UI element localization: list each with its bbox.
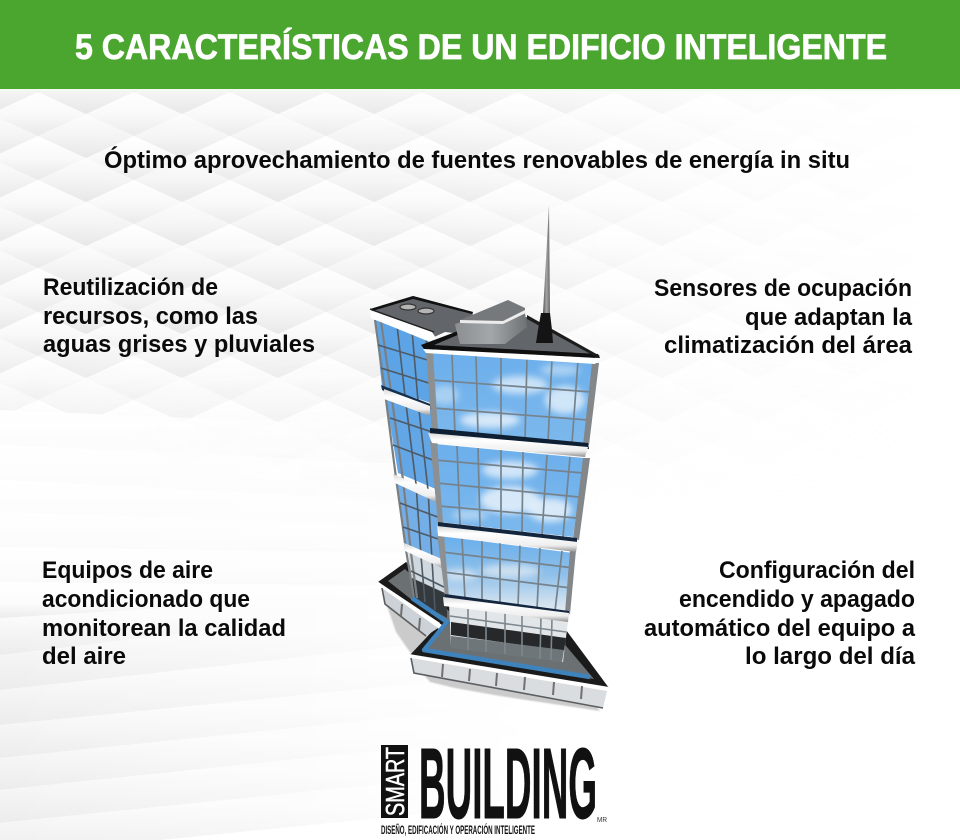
- front roof with penthouse and spire: [421, 205, 600, 364]
- podium blue pipe: [412, 598, 590, 677]
- text: right top feature: Sensores de ocupación: [654, 275, 912, 302]
- logo MR mark: MR: [597, 817, 607, 824]
- front tower: section 4: [449, 604, 568, 662]
- text: left bottom feature: [42, 557, 286, 670]
- front tower: section 3: [437, 533, 576, 614]
- text: right top feature: climatización del área: [664, 332, 913, 359]
- ground shadow: [386, 603, 600, 711]
- rear tower: [370, 296, 473, 618]
- front tower: section 2: [430, 441, 590, 540]
- spire: [543, 205, 550, 313]
- rear roof: [370, 296, 473, 338]
- text: right top feature: [654, 275, 913, 359]
- illustration: smart building: [370, 205, 609, 711]
- text: right bottom feature: [644, 557, 916, 670]
- text: left top feature: aguas grises y pluviales: [43, 331, 315, 358]
- logo: Smart Building: [380, 728, 607, 840]
- text: right bottom feature: Configuración del: [719, 557, 915, 584]
- text: left bottom feature: del aire: [42, 643, 126, 670]
- text: right bottom feature: lo largo del día: [745, 643, 916, 670]
- penthouse: [455, 313, 527, 344]
- background pattern: [0, 91, 666, 840]
- text: left bottom feature: monitorean la calidad: [42, 615, 286, 642]
- text: left top feature: [43, 274, 315, 358]
- logo box SMART: SMART: [380, 747, 410, 816]
- text: right bottom feature: automático del equipo a: [644, 615, 916, 642]
- roof vents: [400, 304, 416, 310]
- text: top feature: Óptimo aprovechamiento de fuentes renovables de energía in situ: [104, 146, 850, 174]
- podium roof: [377, 562, 609, 708]
- text: left top feature: recursos, como las: [43, 303, 258, 330]
- text: left top feature: Reutilización de: [43, 274, 218, 301]
- front tower: ledges: [428, 428, 589, 622]
- text: right bottom feature: encendido y apagado: [679, 586, 915, 613]
- title: 5 CARACTERÍSTICAS DE UN EDIFICIO INTELIGENTE: [75, 27, 887, 67]
- text: left bottom feature: Equipos de aire: [42, 557, 213, 584]
- text: BUILDING: [419, 728, 597, 840]
- front tower: section 1: [426, 352, 599, 445]
- header band: [0, 0, 960, 91]
- text: right top feature: que adaptan la: [745, 304, 913, 331]
- logo tagline: DISEÑO, EDIFICACIÓN Y OPERACIÓN INTELIGENTE: [381, 822, 535, 837]
- text: left bottom feature: acondicionado que: [42, 586, 250, 613]
